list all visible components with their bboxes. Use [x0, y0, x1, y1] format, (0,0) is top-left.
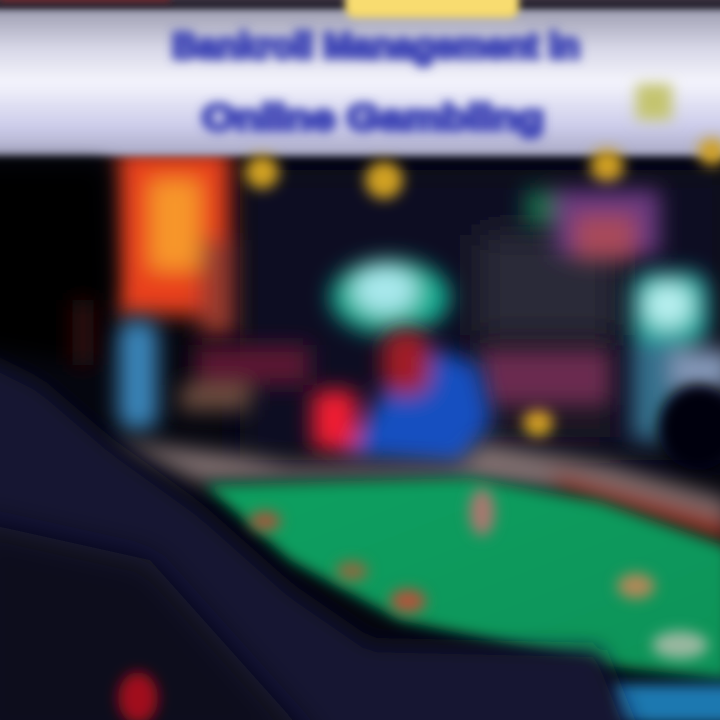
red top-left tint [0, 0, 170, 2]
lower body dark [0, 520, 320, 720]
title: Online Gambling [202, 97, 544, 138]
panel: top banner with title [0, 0, 720, 156]
small olive badge [636, 84, 672, 120]
dealer teal lamp [330, 259, 450, 335]
yellow ceiling lights [245, 138, 720, 437]
shoulders [0, 350, 640, 720]
chips on table [249, 488, 708, 659]
title: Bankroll Management in [172, 25, 580, 66]
reddish ear edge [72, 300, 94, 365]
green table felt [205, 478, 720, 680]
left blue figure [118, 320, 158, 430]
right teal lamp [632, 272, 720, 440]
panel: orange glowing screen [118, 150, 235, 335]
red background seating [180, 345, 310, 410]
banner background [0, 8, 720, 156]
title [172, 25, 580, 138]
back wall [240, 170, 720, 460]
dark figure on right [658, 386, 720, 470]
dealer in blue and red [312, 330, 492, 465]
table rim [110, 440, 720, 545]
red accent [118, 672, 158, 720]
head [0, 165, 112, 365]
colourful wall display [480, 190, 660, 405]
blue table edge [610, 684, 720, 720]
foreground player silhouette [0, 165, 640, 720]
yellow tab [345, 0, 519, 18]
top dark strip [0, 0, 720, 5]
